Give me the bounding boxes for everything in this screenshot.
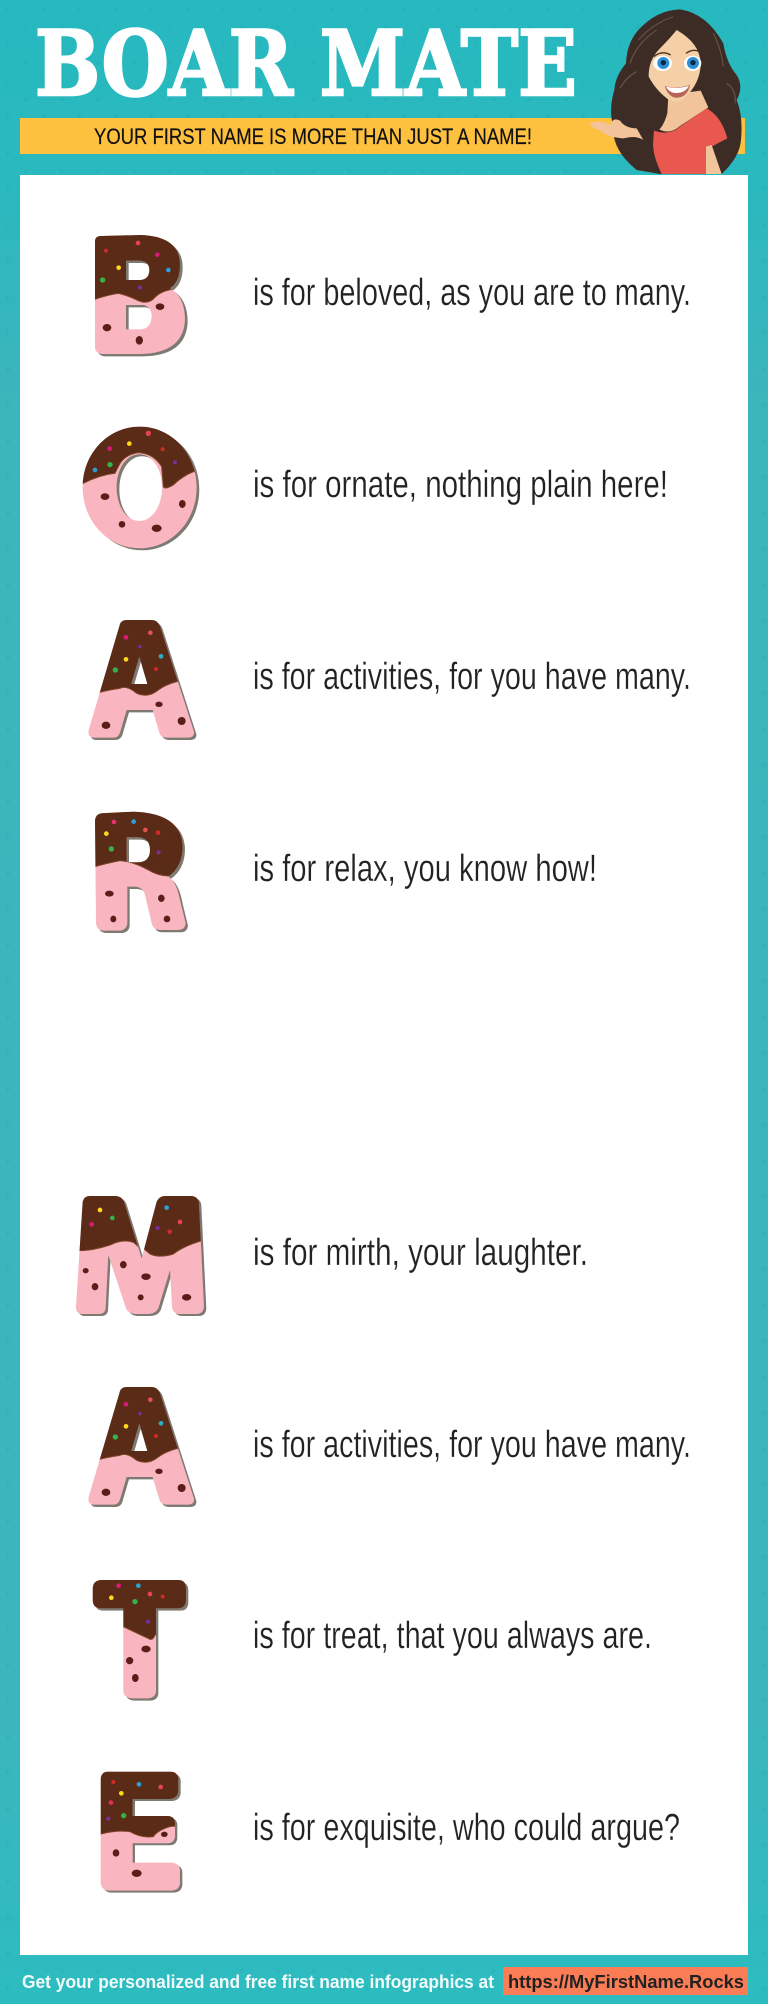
- row: O: [77, 423, 668, 550]
- text: M line: is for mirth, your laughter.: [253, 1232, 588, 1274]
- row: R: [90, 807, 597, 933]
- letter O: [77, 423, 203, 550]
- row: M: [73, 1190, 588, 1316]
- row: B: [90, 230, 691, 356]
- panel: white content area: [20, 175, 748, 955]
- subtitle banner: [20, 118, 745, 154]
- letter R: [95, 812, 188, 933]
- footer URL badge: [503, 1967, 748, 1995]
- title: BOAR MATE: [35, 11, 577, 117]
- row: A: [83, 613, 691, 740]
- letter A second: [88, 1387, 196, 1507]
- footer: [22, 1967, 748, 1995]
- subtitle banner: YOUR FIRST NAME IS MORE THAN JUST A NAME!: [94, 124, 532, 149]
- row: E: [97, 1767, 680, 1893]
- icon: cartoon woman: [590, 9, 742, 174]
- letter B: [90, 230, 188, 356]
- letter E: [97, 1767, 183, 1893]
- row: T: [87, 1573, 652, 1701]
- footer text: Get your personalized and free first name infographics at: [22, 1972, 494, 1992]
- panel: white content area lower: [20, 955, 748, 1955]
- row: second A: [83, 1380, 691, 1507]
- letter A: [88, 620, 196, 740]
- letter M: [73, 1190, 207, 1316]
- letter T: [92, 1580, 188, 1701]
- footer URL badge: https://MyFirstName.Rocks: [508, 1972, 744, 1992]
- text: T line: is for treat, that you always are.: [253, 1615, 652, 1657]
- text: R line: is for relax, you know how!: [253, 848, 597, 890]
